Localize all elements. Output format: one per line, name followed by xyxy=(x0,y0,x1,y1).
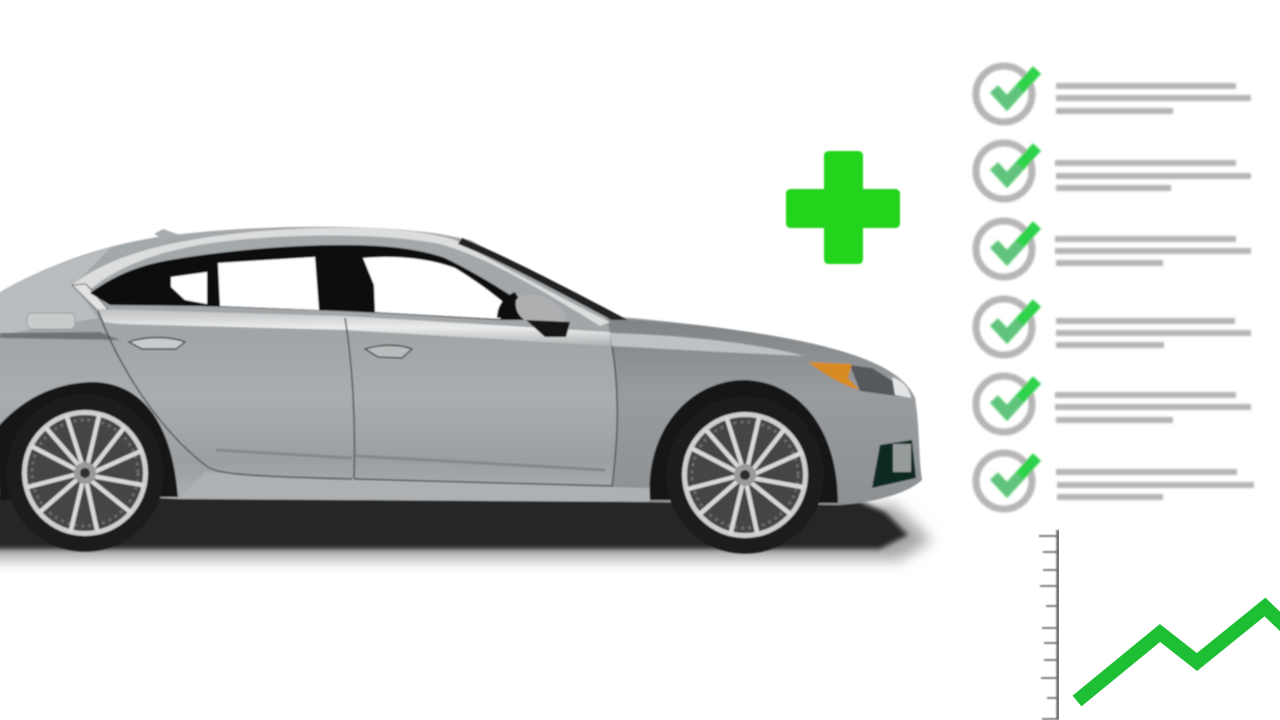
chart axis xyxy=(1039,530,1058,720)
belt line chrome xyxy=(98,309,610,346)
headlight xyxy=(808,362,911,398)
side mirror xyxy=(497,292,570,337)
rear quarter panel xyxy=(0,248,110,335)
line chart xyxy=(1039,530,1280,720)
rear wheel xyxy=(6,394,164,552)
check icon 1 xyxy=(976,66,1037,122)
check icon 5 xyxy=(976,376,1037,432)
front wheel xyxy=(666,396,824,554)
checklist xyxy=(976,66,1254,509)
plus icon xyxy=(786,151,900,264)
car body xyxy=(0,227,922,505)
item 6 text lines xyxy=(1056,469,1254,500)
door handles xyxy=(129,338,412,358)
car illustration xyxy=(0,227,932,560)
front fender and hood xyxy=(607,318,922,505)
window frame xyxy=(90,245,545,320)
front wheel arch xyxy=(650,380,838,503)
door seams xyxy=(98,311,617,486)
windshield edge xyxy=(458,238,628,320)
check icon 6 xyxy=(976,453,1037,509)
rear wheel arch xyxy=(0,382,178,500)
check icon 3 xyxy=(976,221,1037,277)
rear glass xyxy=(218,257,319,310)
front glass xyxy=(363,257,509,319)
item 1 text lines xyxy=(1056,83,1251,114)
ground shadow xyxy=(0,495,932,560)
check icon 4 xyxy=(976,299,1037,355)
hood highlight xyxy=(610,333,805,356)
item 3 text lines xyxy=(1055,236,1251,266)
fuel cap xyxy=(27,313,75,329)
roof chrome strip xyxy=(72,228,610,326)
check icon 2 xyxy=(976,143,1037,199)
antenna xyxy=(154,229,180,240)
item 5 text lines xyxy=(1055,392,1251,423)
item 4 text lines xyxy=(1056,318,1251,348)
front bumper intake xyxy=(872,440,916,488)
sill highlight xyxy=(180,472,650,501)
chart trend line xyxy=(1077,607,1280,701)
item 2 text lines xyxy=(1055,160,1251,191)
quarter glass xyxy=(171,272,207,304)
